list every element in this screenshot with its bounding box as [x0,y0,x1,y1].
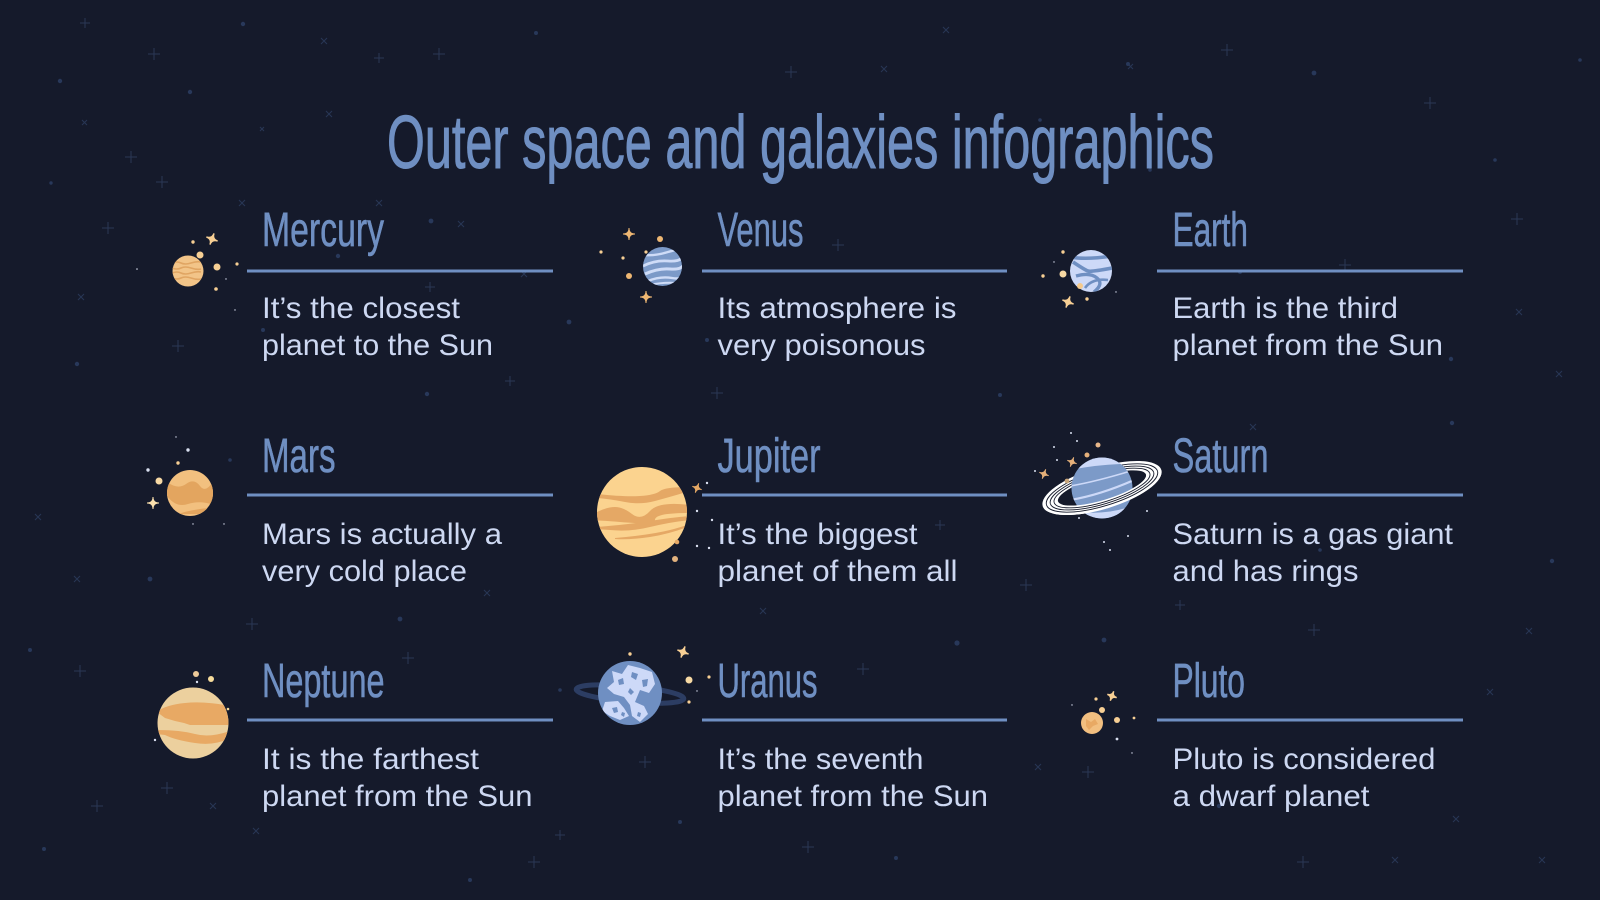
text: Neptune description: It is the farthest [262,743,480,776]
icon: Mars planet [146,436,225,525]
text: Uranus description [718,743,988,813]
text: Venus description [718,292,956,362]
panel: Jupiter [594,430,1007,588]
text: Pluto description [1172,743,1436,813]
text: Pluto description: a dwarf planet [1172,780,1370,813]
heading: Mars: Mars [262,430,336,483]
text: Mercury description: planet to the Sun [262,329,493,362]
text: Mercury description [262,292,493,362]
panel: Saturn [1034,430,1463,588]
text: Mars description: very cold place [262,555,467,588]
icon: Saturn planet [1034,432,1167,551]
heading: Saturn: Saturn [1172,430,1268,483]
icon: Neptune planet [154,671,230,758]
text: Earth description: planet from the Sun [1172,329,1443,362]
text: Neptune description: planet from the Sun [262,780,532,813]
icon: Jupiter planet [594,467,713,562]
text: Venus description: Its atmosphere is [718,292,956,325]
heading: Venus: Venus [718,204,804,257]
text: Pluto description: Pluto is considered [1172,743,1436,776]
text: Earth description: Earth is the third [1172,292,1398,325]
text: Earth description [1172,292,1443,362]
text: Saturn description [1172,518,1454,588]
heading: Earth: Earth [1172,204,1248,257]
icon: Mercury planet [136,231,239,311]
panel: Mars [146,430,553,588]
panel: Earth [1041,204,1463,362]
panel: Uranus [576,644,1007,813]
text: Jupiter description: planet of them all [718,555,958,588]
heading: Uranus: Uranus [718,655,818,708]
text: Saturn description: Saturn is a gas giant [1172,518,1454,551]
icon: Uranus planet [576,644,711,725]
heading: Neptune: Neptune [262,655,384,708]
text: Mercury description: It’s the closest [262,292,461,325]
text: Saturn description: and has rings [1172,555,1358,588]
text: Jupiter description: It’s the biggest [718,518,918,551]
text: Mars description: Mars is actually a [262,518,502,551]
text: Neptune description [262,743,532,813]
icon: Earth planet [1041,250,1117,310]
text: Uranus description: It’s the seventh [718,743,924,776]
heading: Pluto: Pluto [1172,655,1245,708]
panel: Mercury [136,204,553,362]
icon: Venus planet [599,228,684,303]
text: Jupiter description [718,518,958,588]
text: Uranus description: planet from the Sun [718,780,988,813]
panel: Venus [599,204,1007,362]
panel: Neptune [154,655,553,813]
heading: Jupiter: Jupiter [718,430,821,483]
text: Venus description: very poisonous [718,329,926,362]
panel: Pluto [1071,655,1463,813]
icon: Pluto planet [1071,690,1135,754]
text: Mars description [262,518,502,588]
heading: Mercury: Mercury [262,204,384,257]
